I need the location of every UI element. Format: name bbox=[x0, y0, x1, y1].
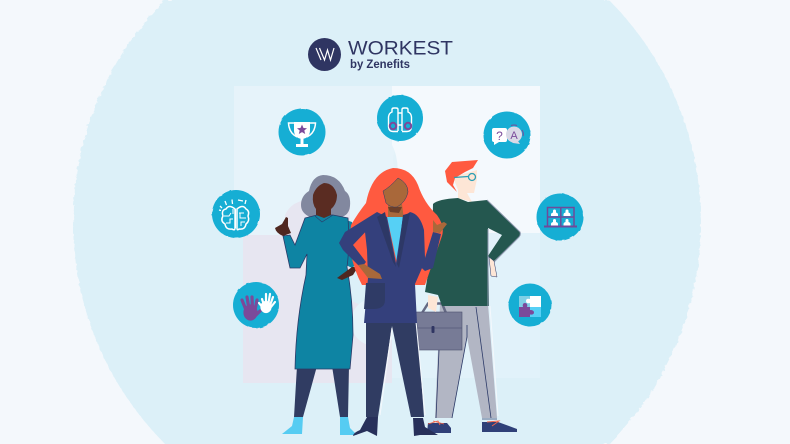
pocket bbox=[364, 283, 385, 309]
icon: trophy bbox=[278, 108, 326, 156]
background circle bbox=[73, 0, 701, 444]
trousers bbox=[435, 304, 497, 418]
figure: woman in navy blazer bbox=[339, 168, 447, 436]
sweater bbox=[425, 198, 520, 306]
trouser lines bbox=[436, 307, 497, 419]
shoes bbox=[427, 422, 517, 433]
icon: brain bbox=[212, 190, 260, 238]
icon: question and answer: A bbox=[510, 130, 518, 142]
face bbox=[383, 178, 408, 207]
backdrop shapes bbox=[234, 86, 540, 383]
logo mark bbox=[308, 38, 341, 71]
neck and head bbox=[453, 170, 477, 202]
figure: woman in teal dress bbox=[275, 175, 359, 435]
figure: man in green sweater bbox=[416, 160, 520, 433]
icon: binoculars bbox=[377, 95, 423, 141]
raised hand bbox=[275, 217, 291, 236]
icon: video call laptop bbox=[536, 194, 584, 240]
trouser highlight bbox=[490, 306, 498, 416]
glasses bbox=[454, 174, 476, 180]
legs bbox=[294, 366, 349, 417]
far sleeve bbox=[346, 220, 359, 268]
face bbox=[313, 183, 337, 218]
hair bbox=[301, 175, 350, 217]
dress bbox=[283, 215, 353, 369]
icon: high five hands bbox=[233, 282, 279, 328]
collar bbox=[315, 215, 333, 222]
shirt bbox=[387, 217, 403, 263]
logo bbox=[308, 38, 453, 71]
blazer right arm bbox=[413, 232, 441, 271]
laces bbox=[428, 421, 499, 426]
hair bbox=[350, 168, 443, 285]
boots bbox=[282, 417, 357, 435]
neck bbox=[388, 204, 404, 220]
hip hand bbox=[337, 267, 358, 280]
blazer left arm bbox=[339, 212, 377, 268]
leg highlights bbox=[380, 290, 425, 415]
hip hand bbox=[489, 257, 497, 277]
sweater highlight bbox=[487, 200, 520, 306]
hip hand bbox=[358, 264, 382, 279]
neck shadow bbox=[388, 207, 402, 213]
icon: question and answer bbox=[484, 112, 530, 158]
hair bbox=[445, 160, 478, 192]
blazer body bbox=[364, 212, 425, 323]
icon: question and answer: ? bbox=[496, 129, 503, 143]
briefcase bbox=[416, 304, 462, 350]
logo wordmark: WORKEST bbox=[348, 38, 453, 60]
lapels bbox=[377, 212, 410, 268]
raised hand bbox=[433, 220, 447, 233]
briefcase hand bbox=[428, 295, 438, 312]
legs bbox=[366, 322, 424, 417]
icon: puzzle bbox=[508, 284, 552, 326]
logo byline: by Zenefits bbox=[350, 59, 410, 71]
boots bbox=[353, 417, 438, 436]
